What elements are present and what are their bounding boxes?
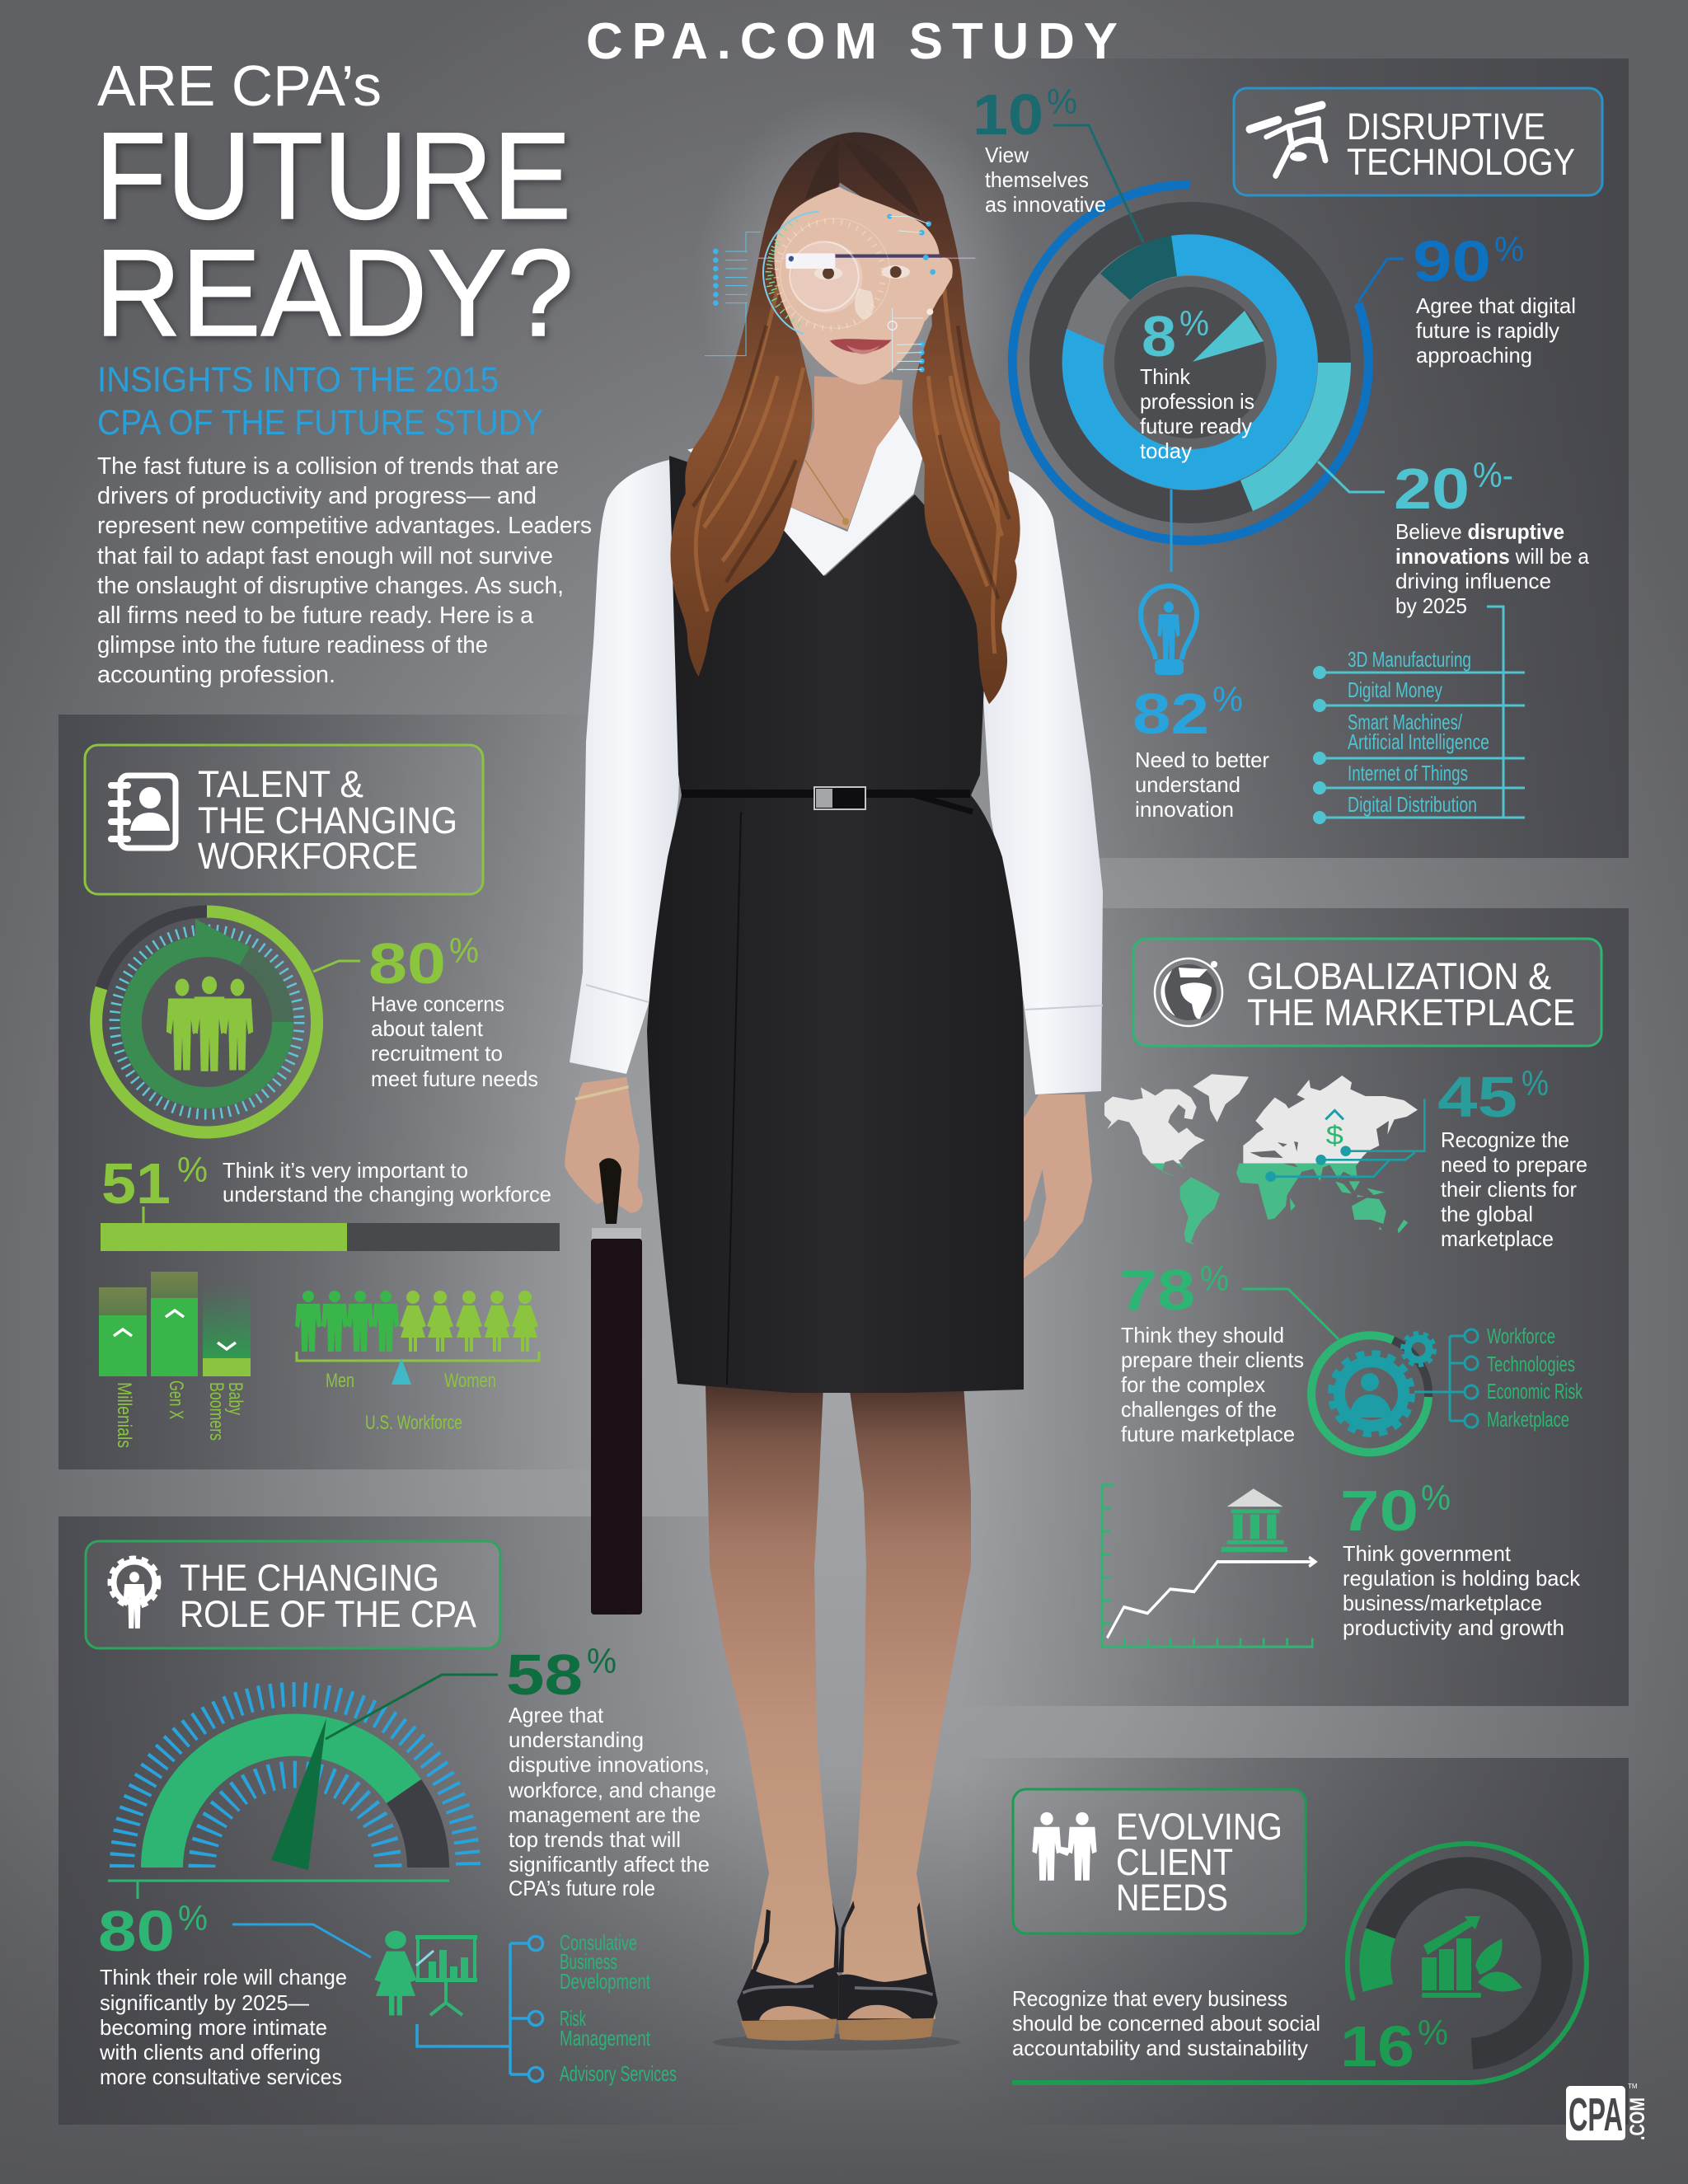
list: marketplace challenges: Economic Risk xyxy=(1487,1379,1583,1404)
icon: gears with person xyxy=(1311,1333,1434,1452)
introduction paragraph: glimpse into the future readiness of the xyxy=(97,632,488,658)
radial chart 16% xyxy=(1012,1844,1587,2083)
stat: 80% talent recruitment xyxy=(313,931,538,1091)
stat: 51% bar: Think it’s very important to xyxy=(223,1158,468,1183)
stat: 90% digital future: % xyxy=(1494,230,1524,269)
stat: 45% global marketplace: need to prepare xyxy=(1441,1152,1587,1177)
introduction paragraph: accounting profession. xyxy=(97,662,335,688)
section header xyxy=(1013,1789,1306,1933)
donut chart xyxy=(1012,185,1368,541)
face with glasses and heads-up display xyxy=(705,140,975,385)
icon: gear with person xyxy=(110,1558,158,1629)
stat: 51% bar: 51 xyxy=(101,1151,171,1216)
stat: 51% bar: understand the changing workforce xyxy=(223,1182,551,1207)
icon: drone xyxy=(1250,105,1325,176)
stat: 70% government regulation: 70 xyxy=(1340,1479,1418,1543)
stat: 80% role will change: significantly by 2025— xyxy=(100,1990,309,2015)
stat: 82% understand innovation: understand xyxy=(1135,772,1240,797)
text: social accountability: accountability and sustainability xyxy=(1012,2036,1308,2060)
stat: 20% disruptive innovations xyxy=(1318,456,1590,618)
stat: 20% disruptive innovations: Believe disruptive xyxy=(1395,519,1564,544)
stat: 80% talent recruitment: Have concerns xyxy=(371,991,504,1016)
panel: the changing role of the CPA xyxy=(86,1541,716,2089)
generational bar chart: Baby xyxy=(224,1382,246,1415)
heading text xyxy=(1347,105,1575,183)
stat: 58% top trends xyxy=(326,1642,716,1900)
stat: 45% global marketplace xyxy=(1437,1064,1587,1251)
stat: 45% global marketplace: the global xyxy=(1441,1202,1533,1226)
introduction paragraph xyxy=(97,453,592,688)
introduction paragraph: The fast future is a collision of trends that are xyxy=(97,453,559,480)
stat: 10% innovative: View xyxy=(985,143,1029,167)
stat: 8% future ready: % xyxy=(1179,304,1209,344)
stat: 58% top trends: 58 xyxy=(506,1643,583,1707)
introduction paragraph: all firms need to be future ready. Here is a xyxy=(97,602,534,629)
stat: 80% talent recruitment: about talent xyxy=(371,1016,484,1041)
heading text: TALENT & xyxy=(198,763,363,805)
panel: disruptive technology xyxy=(973,82,1602,824)
pictogram: men and women in U.S. workforce xyxy=(295,1291,539,1434)
stat: 78% complex challenges: % xyxy=(1200,1259,1229,1299)
stat: 82% understand innovation: 82 xyxy=(1132,682,1209,746)
stat: 82% understand innovation: % xyxy=(1212,680,1243,719)
stat: 78% complex challenges: 78 xyxy=(1119,1258,1195,1322)
heading text xyxy=(180,1557,476,1635)
radial chart 80% xyxy=(96,912,317,1132)
stat: 51% bar xyxy=(101,1151,560,1251)
list: consultative services tree: Management xyxy=(560,2026,651,2050)
stat: 90% digital future xyxy=(1358,229,1576,368)
stat: 58% top trends: CPA’s future role xyxy=(509,1876,655,1900)
heading text: CLIENT xyxy=(1116,1841,1233,1883)
headline: future ready: FUTURE xyxy=(95,106,571,245)
panel background: talent xyxy=(59,715,603,1469)
list: marketplace challenges: Marketplace xyxy=(1487,1407,1569,1432)
stat: 8% future ready: 8 xyxy=(1142,304,1176,368)
logo: CPA.COM: TM xyxy=(1628,2083,1638,2090)
list: disruptive innovations xyxy=(1313,607,1525,824)
stat: 8% future ready: today xyxy=(1140,438,1192,463)
heading text: THE CHANGING xyxy=(198,799,457,841)
section header xyxy=(1133,939,1601,1046)
section header xyxy=(85,745,483,894)
world map: $ xyxy=(1326,1120,1343,1151)
stat: 80% talent recruitment: recruitment to xyxy=(371,1041,503,1066)
text: social accountability xyxy=(1012,1986,1320,2060)
stat: 16%: 16 xyxy=(1340,2014,1414,2079)
introduction paragraph: represent new competitive advantages. Leaders xyxy=(97,513,592,539)
stat: 58% top trends: disputive innovations, xyxy=(509,1752,710,1777)
stat: 16%: % xyxy=(1418,2013,1448,2053)
stat: 80% role will change: 80 xyxy=(98,1899,175,1963)
stat: 51% bar: % xyxy=(177,1151,208,1190)
logo: CPA.COM: CPA xyxy=(1568,2088,1623,2141)
pictogram: men and women in U.S. workforce: Men xyxy=(326,1370,354,1392)
stat: 90% digital future: future is rapidly xyxy=(1416,318,1559,343)
stat: 90% digital future: 90 xyxy=(1413,229,1491,293)
stat: 20% disruptive innovations: 20 xyxy=(1394,457,1470,521)
stat: 58% top trends: workforce, and change xyxy=(508,1778,716,1802)
world map xyxy=(1104,1074,1418,1245)
stat: 80% role will change: Think their role will change xyxy=(100,1965,347,1990)
heading text: WORKFORCE xyxy=(198,835,418,877)
stat: 45% global marketplace: marketplace xyxy=(1441,1226,1554,1251)
stat: 58% top trends: understanding xyxy=(509,1727,644,1752)
stat: 80% role will change: % xyxy=(178,1899,208,1938)
heading text: NEEDS xyxy=(1116,1877,1228,1919)
heading text xyxy=(1247,955,1575,1033)
headline: future ready: READY? xyxy=(95,223,574,362)
list: disruptive innovations: Smart Machines/ xyxy=(1348,710,1463,734)
introduction paragraph: that fail to adapt fast enough will not survive xyxy=(97,543,553,569)
stat: 16% xyxy=(1340,2013,1448,2079)
logo: CPA.COM: .COM xyxy=(1626,2097,1649,2140)
stat: 20% disruptive innovations: %- xyxy=(1473,456,1513,495)
stat: 45% global marketplace: Recognize the xyxy=(1441,1127,1569,1152)
stat: 10% innovative xyxy=(973,82,1143,242)
headline question: ARE CPA’s xyxy=(97,54,382,118)
stat: 82% understand innovation: Need to better xyxy=(1135,748,1269,772)
connector line to lightbulb xyxy=(1170,490,1172,572)
stat: 70% government regulation: business/marketplace xyxy=(1343,1591,1542,1615)
headline: future ready xyxy=(95,106,574,362)
stat: 8% future ready: Think xyxy=(1140,364,1191,389)
icon: three business people xyxy=(166,976,253,1071)
stat: 78% complex challenges: challenges of the xyxy=(1121,1397,1277,1422)
list: disruptive innovations: 3D Manufacturing xyxy=(1348,647,1471,672)
stat: 10% innovative: % xyxy=(1047,82,1077,122)
list: disruptive innovations: Digital Distribution xyxy=(1348,792,1477,817)
panel: globalization and the marketplace xyxy=(1102,939,1601,1647)
stat: 78% complex challenges xyxy=(1119,1258,1339,1446)
generational bar chart: Boomers xyxy=(205,1382,227,1441)
list: disruptive innovations: Digital Money xyxy=(1348,677,1442,702)
stat: 78% complex challenges: Think they should xyxy=(1121,1323,1284,1347)
icon: lightbulb with person xyxy=(1141,586,1197,675)
subheading xyxy=(97,360,543,443)
stat: 58% top trends: % xyxy=(587,1642,617,1681)
section header xyxy=(86,1541,500,1648)
introduction paragraph: the onslaught of disruptive changes. As such, xyxy=(97,573,564,599)
panel background: globalization xyxy=(961,908,1629,1706)
stat: 90% digital future: Agree that digital xyxy=(1416,293,1576,318)
stat: 58% top trends: management are the xyxy=(509,1802,701,1827)
title: CPA.COM STUDY xyxy=(586,13,1118,70)
stat: 10% innovative: 10 xyxy=(973,82,1043,147)
stat: 78% complex challenges: for the complex xyxy=(1121,1372,1265,1397)
pictogram: men and women in U.S. workforce: U.S. Workforce xyxy=(365,1412,462,1434)
stat: 80% talent recruitment: 80 xyxy=(368,931,446,996)
list: consultative services tree: Risk xyxy=(560,2006,587,2031)
photo: woman with smart glasses and briefcase xyxy=(565,91,1103,2050)
connector line to presenter xyxy=(232,1924,371,1957)
generational bar chart: Millenials xyxy=(113,1382,135,1448)
panel background: client needs xyxy=(961,1758,1629,2125)
stat: 20% disruptive innovations: innovations will be a xyxy=(1395,544,1590,569)
stat: 80% role will change: more consultative services xyxy=(100,2064,342,2089)
stat: 78% complex challenges: prepare their clients xyxy=(1121,1347,1304,1372)
heading text: GLOBALIZATION & xyxy=(1247,955,1551,997)
stat: 45% global marketplace: % xyxy=(1522,1064,1549,1104)
stat: 70% government regulation xyxy=(1340,1479,1581,1640)
icon: presenter at chart board xyxy=(374,1931,477,2015)
section header xyxy=(1234,88,1602,195)
stat: 80% role will change: with clients and offering xyxy=(99,2040,321,2064)
stat: 82% understand innovation: innovation xyxy=(1135,797,1234,822)
stat: 58% top trends: top trends that will xyxy=(509,1827,681,1852)
list: marketplace challenges: Technologies xyxy=(1487,1352,1575,1376)
stat: 20% disruptive innovations: by 2025 xyxy=(1395,593,1467,618)
heading text: EVOLVING xyxy=(1116,1806,1282,1848)
stat: 78% complex challenges: future marketplace xyxy=(1121,1422,1295,1446)
subheading: CPA OF THE FUTURE STUDY xyxy=(97,403,543,443)
stat: 20% disruptive innovations: driving influence xyxy=(1395,569,1551,593)
heading text: THE MARKETPLACE xyxy=(1247,991,1575,1033)
text: social accountability: Recognize that every business xyxy=(1012,1986,1287,2011)
stat: 70% government regulation: regulation is holding back xyxy=(1343,1566,1581,1591)
icon: growth chart with leaf xyxy=(1422,1916,1522,1998)
list: consultative services tree: Advisory Services xyxy=(560,2061,677,2086)
icon: handshake xyxy=(1032,1812,1097,1881)
stat: 10% innovative: themselves xyxy=(985,167,1089,192)
panel background: changing role xyxy=(59,1516,800,2125)
heading text: ROLE OF THE CPA xyxy=(180,1593,476,1635)
list: disruptive innovations: Internet of Things xyxy=(1348,761,1468,785)
icon: globe xyxy=(1155,958,1222,1026)
line chart with bank icon xyxy=(1102,1485,1315,1647)
panel: talent and the changing workforce xyxy=(85,745,560,1448)
generational bar chart xyxy=(99,1272,251,1448)
stat: 8% future ready: profession is xyxy=(1140,389,1254,414)
heading text: THE CHANGING xyxy=(180,1557,439,1599)
heading text xyxy=(1116,1806,1282,1919)
list: marketplace challenges: Workforce xyxy=(1487,1324,1555,1348)
heading text: TECHNOLOGY xyxy=(1347,141,1575,183)
stat: 80% talent recruitment: % xyxy=(449,931,479,971)
stat: 80% talent recruitment: meet future needs xyxy=(371,1066,538,1091)
pictogram: men and women in U.S. workforce: Women xyxy=(444,1370,496,1392)
icon: address book xyxy=(111,776,176,848)
stat: 80% role will change: becoming more intimate xyxy=(100,2015,327,2040)
stat: 58% top trends: significantly affect the xyxy=(509,1852,710,1877)
heading text xyxy=(198,763,457,877)
generational bar chart: Gen X xyxy=(165,1380,187,1419)
stat: 82% understand innovation xyxy=(1132,680,1269,822)
subheading: INSIGHTS INTO THE 2015 xyxy=(97,360,499,400)
introduction paragraph: drivers of productivity and progress— and xyxy=(97,483,537,509)
stat: 70% government regulation: Think government xyxy=(1343,1541,1512,1566)
stat: 45% global marketplace: 45 xyxy=(1437,1065,1517,1129)
connector lines from map to 45% xyxy=(1265,1099,1424,1182)
stat: 70% government regulation: productivity and growth xyxy=(1343,1615,1564,1640)
gauge chart xyxy=(108,1694,468,1899)
stat: 10% innovative: as innovative xyxy=(985,192,1106,217)
list: consultative services tree: Development xyxy=(560,1969,651,1994)
stat: 80% role will change xyxy=(98,1899,347,2089)
stat: 58% top trends: Agree that xyxy=(509,1703,604,1727)
headline block xyxy=(95,54,592,688)
stat: 8% future ready: future ready xyxy=(1140,414,1252,438)
stat: 8% future ready xyxy=(1140,304,1254,463)
list: consultative services tree: Consulative xyxy=(560,1930,637,1955)
list: marketplace challenges xyxy=(1414,1324,1583,1432)
heading text: DISRUPTIVE xyxy=(1347,105,1545,148)
panel: evolving client needs xyxy=(1012,1789,1587,2083)
text: social accountability: should be concerned about social xyxy=(1012,2011,1320,2036)
stat: 70% government regulation: % xyxy=(1421,1479,1451,1518)
list: consultative services tree: Business xyxy=(560,1949,617,1974)
stat: 90% digital future: approaching xyxy=(1416,343,1532,368)
panel background: disruptive technology xyxy=(961,59,1629,858)
list: consultative services tree xyxy=(417,1930,677,2086)
list: disruptive innovations: Artificial Intelligence xyxy=(1348,729,1489,754)
stat: 45% global marketplace: their clients for xyxy=(1441,1177,1577,1202)
